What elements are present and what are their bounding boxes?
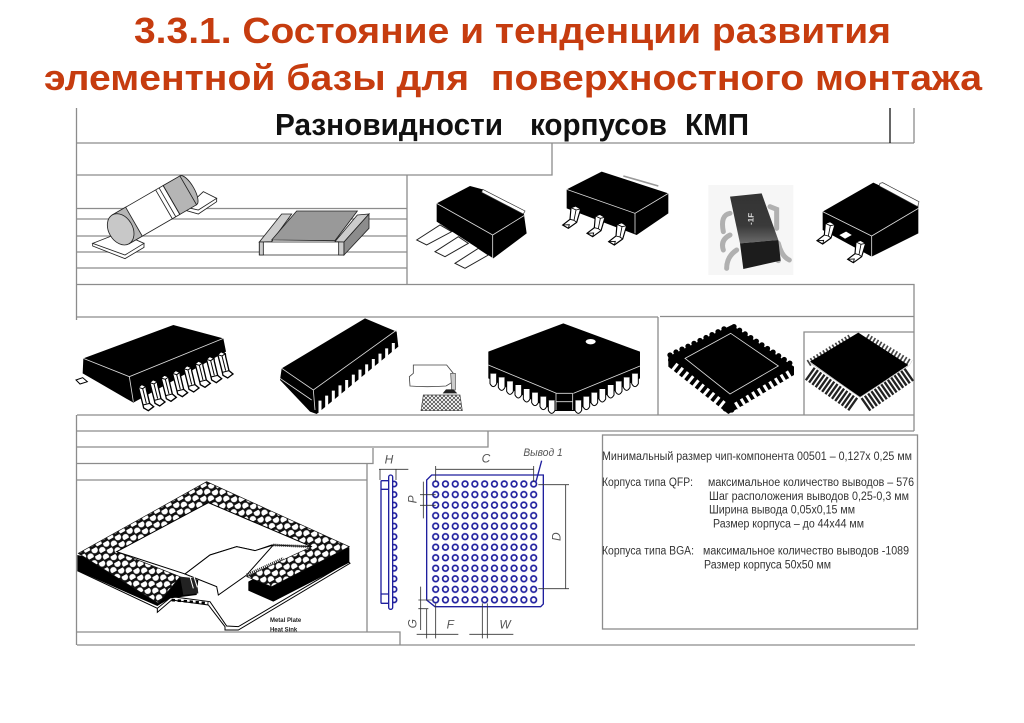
label: metal plate heat sink: Heat Sink — [270, 627, 298, 633]
component: photographed SOT chip: -1F — [746, 213, 756, 225]
panel: specifications text: максимальное количество выводов – 576 — [708, 477, 914, 489]
title: элементной базы для поверхностного монтажа — [44, 57, 983, 98]
dimension labels: P — [405, 495, 419, 503]
heading: КМП — [685, 107, 749, 142]
side view of package — [381, 475, 398, 609]
heading: Разновидности — [275, 107, 503, 142]
dimension labels: W — [499, 617, 512, 631]
dimension labels: D — [550, 532, 564, 541]
panel: specifications text: Ширина вывода 0,05х0,15 мм — [709, 504, 855, 516]
title: 3.3.1. Состояние и тенденции развития — [134, 10, 891, 51]
component: SOT-223 package — [417, 186, 527, 268]
dimension labels: G — [405, 619, 419, 628]
component: PLCC package — [488, 323, 640, 413]
figure: package varieties sheet — [76, 107, 919, 645]
panel: specifications text: Размер корпуса 50х50 мм — [704, 560, 831, 572]
component: DPAK package — [817, 183, 919, 263]
component: BGA package cutaway — [77, 482, 350, 633]
panel: specifications text: Минимальный размер чип-компонента 00501 – 0,127х 0,25 мм — [602, 451, 912, 463]
panel: specifications text: Размер корпуса – до 44х44 мм — [713, 518, 864, 530]
dimension labels: F — [447, 617, 455, 631]
panel: specifications text: Шаг расположения выводов 0,25-0,3 мм — [709, 491, 909, 503]
dimension labels: H — [385, 452, 394, 466]
heading — [275, 107, 749, 142]
label: metal plate heat sink: Metal Plate — [270, 618, 302, 624]
panel: specifications text: Корпуса типа BGA: — [602, 546, 694, 558]
diagram: BGA dimension drawing — [379, 447, 569, 638]
icon: solder joint detail — [409, 365, 462, 411]
component: SOJ package — [280, 318, 398, 414]
panel: specifications text: Корпуса типа QFP: — [602, 477, 693, 489]
component: leadless chip carrier — [668, 325, 794, 414]
panel: specifications text — [602, 435, 918, 629]
dimension labels: Вывод 1 — [523, 447, 563, 459]
component: chip resistor — [259, 211, 369, 255]
component: photographed SOT chip — [708, 185, 793, 275]
dimension lines — [379, 466, 569, 638]
top view of ball grid — [427, 475, 543, 607]
label: metal plate heat sink — [270, 618, 302, 633]
component: cylindrical MELF fuse — [93, 173, 217, 259]
dimension labels — [385, 447, 564, 631]
dimension labels: C — [482, 452, 491, 466]
heading: корпусов — [530, 107, 667, 142]
panel: specifications text: максимальное количество выводов -1089 — [703, 546, 909, 558]
component: SOT-89 package — [563, 172, 668, 245]
component: QFP package — [808, 333, 911, 405]
component: SOIC package — [76, 325, 233, 411]
title — [44, 10, 983, 98]
